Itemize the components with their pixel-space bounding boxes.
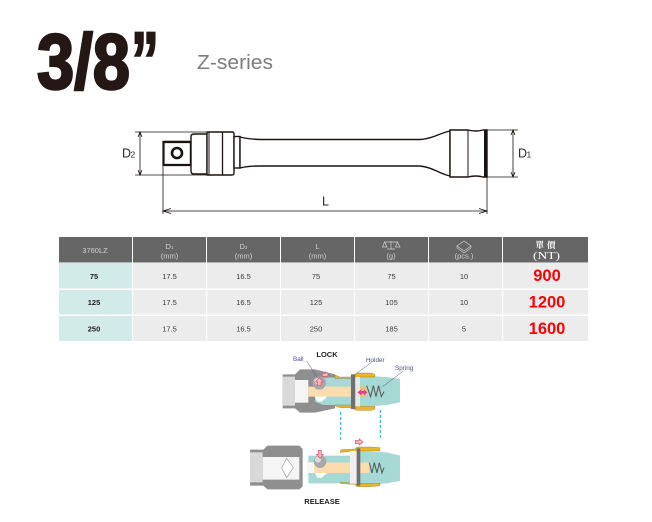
label: Spring: Spring: [395, 365, 414, 372]
table row: 250: 5: [462, 324, 466, 334]
table row: 75: [59, 263, 588, 288]
table row: 250: 16.5: [236, 324, 251, 334]
lock mechanism drawing: [283, 361, 403, 413]
table row: 75: 16.5: [236, 272, 251, 281]
table row: 75: 10: [460, 272, 468, 281]
drawing: shaft: [240, 131, 450, 176]
table row: 125: 17.5: [162, 298, 177, 307]
label: LOCK: LOCK: [316, 350, 338, 359]
table row: 125: [59, 290, 588, 314]
header: unit price: [533, 239, 560, 262]
icon: balance scale: [382, 241, 400, 249]
table row: 75: 900: [533, 267, 561, 285]
dimension: D1: [487, 130, 532, 177]
dimension: L: [163, 165, 487, 214]
label: Ball: Ball: [293, 356, 304, 363]
title: 3/8 inch: 3/8: [37, 18, 130, 106]
table row: 75: 75: [387, 272, 396, 281]
dashed guide lines: [341, 410, 380, 440]
diagram: lock state: [283, 350, 414, 413]
table header: [59, 237, 588, 262]
drawing: square drive: [164, 141, 191, 166]
dimension: D1: D: [518, 146, 527, 160]
table row: 250: 1600: [529, 320, 565, 338]
dimension: D2: [122, 132, 206, 175]
title: 3/8 inch: ”: [131, 16, 159, 107]
label: RELEASE: RELEASE: [304, 497, 340, 506]
header: unit price: (NT): [533, 251, 560, 262]
drawing: collar: [191, 132, 240, 175]
table row: 125: 10: [460, 298, 468, 307]
table row: 250: 185: [385, 324, 398, 334]
release mechanism drawing: [250, 439, 400, 489]
table row: 125: 125: [310, 298, 322, 307]
icon: box: [457, 241, 471, 253]
table header: 3760LZ: [82, 246, 108, 255]
label: Holder: Holder: [366, 357, 385, 364]
table row: 125: 105: [385, 298, 398, 307]
table header: (pcs.): [455, 252, 474, 260]
table row: 250: 250: [88, 324, 100, 334]
technical drawing: extension bar: [122, 130, 532, 214]
drawing: socket head: [450, 130, 487, 177]
dimension: L: L: [322, 194, 329, 208]
table row: 125: 1200: [529, 294, 565, 312]
table row: 75: 17.5: [162, 272, 177, 281]
table header: D2: [240, 242, 248, 251]
table row: 75: 75: [90, 272, 98, 281]
table row: 250: 250: [310, 324, 322, 334]
subtitle: Z-series: Z-series: [197, 52, 273, 74]
table row: 75: 75: [312, 272, 320, 281]
table header: L: [315, 242, 320, 251]
specification table: [59, 237, 588, 341]
header: unit price: 單價: [535, 239, 559, 251]
table row: 250: [59, 316, 588, 341]
table row: 125: 125: [88, 298, 100, 307]
table header: D1: [166, 242, 174, 251]
table row: 125: 16.5: [236, 298, 251, 307]
table header: (mm): [235, 252, 253, 260]
diagram: release state: [250, 439, 400, 506]
dimension: D2: 2: [130, 150, 136, 160]
table header: (g): [386, 252, 396, 260]
table header: (mm): [309, 252, 327, 260]
dimension: D1: 1: [526, 150, 532, 160]
dimension: D2: D: [122, 146, 131, 160]
table row: 250: 17.5: [162, 324, 177, 334]
table header: (mm): [161, 252, 179, 260]
